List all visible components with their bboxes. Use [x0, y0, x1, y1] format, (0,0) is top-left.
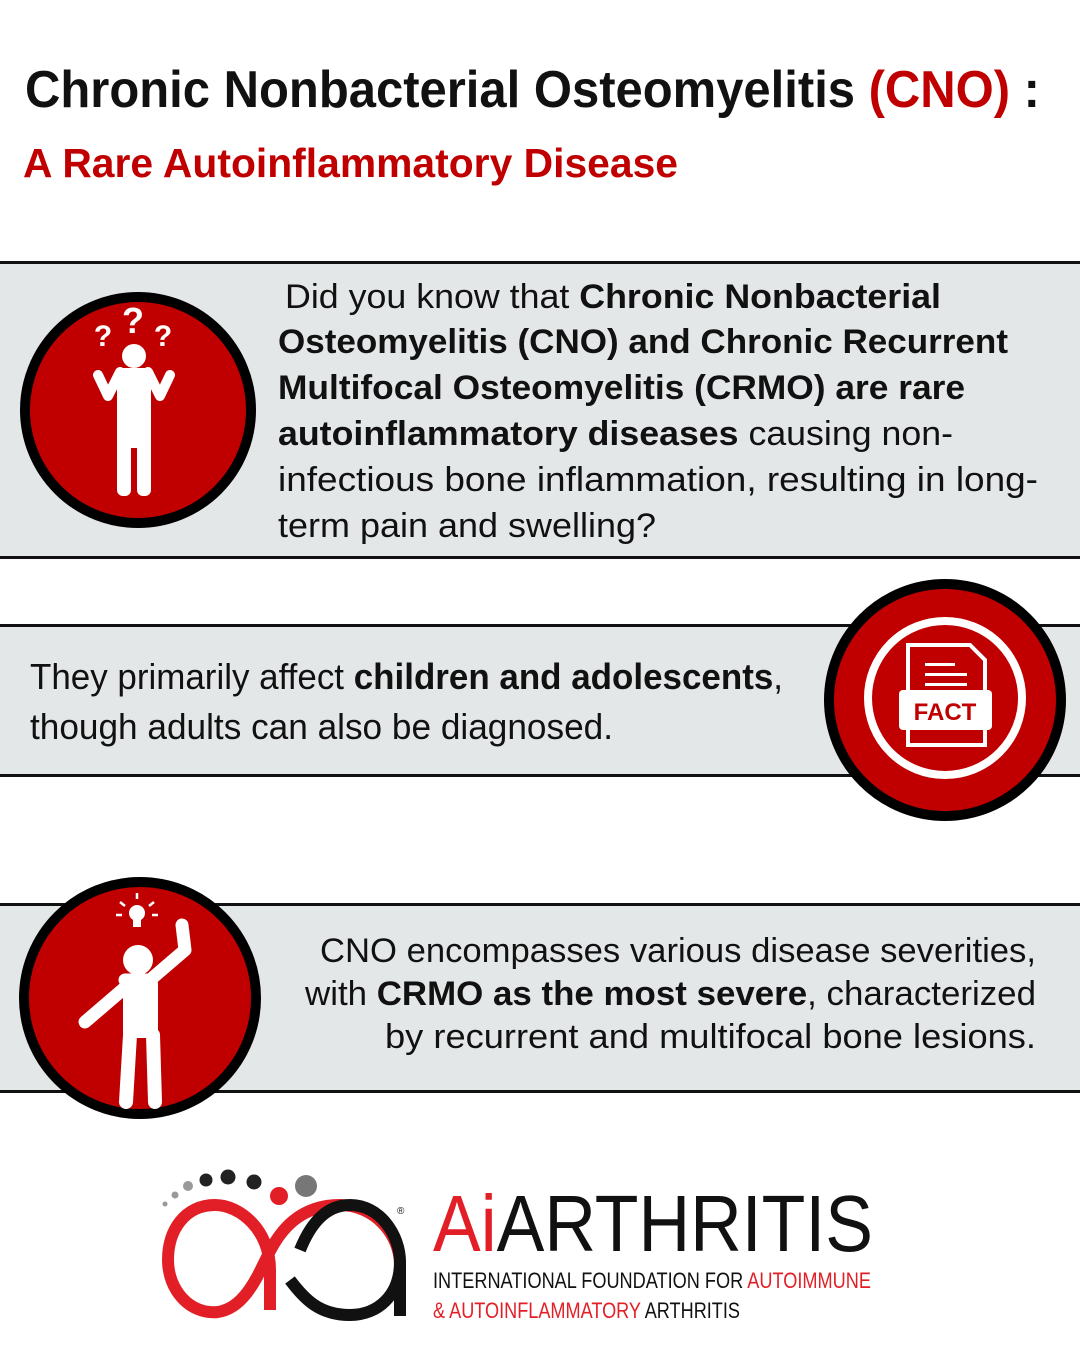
text block: did you know: Osteomyelitis (CNO) and Chronic Recurrent — [278, 323, 1008, 361]
panel: did you know — [0, 261, 1080, 559]
icon: confused person — [25, 297, 251, 523]
text block: did you know: Multifocal Osteomyelitis (CRMO) are rare — [278, 369, 965, 407]
logo wordmark: AiARTHRITIS — [433, 1179, 873, 1268]
text block: children: They primarily affect children and adolescents, — [30, 656, 783, 697]
text block: children — [30, 656, 783, 747]
text block: did you know: infectious bone inflammation, resulting in long- — [278, 461, 1038, 499]
text block: severity: CNO encompasses various disease severities, — [320, 932, 1036, 970]
icon: confused person: ? — [94, 320, 112, 353]
logo mark: ® — [397, 1206, 405, 1217]
text block: did you know: term pain and swelling? — [278, 507, 656, 545]
panel: children and adolescents — [0, 584, 1080, 816]
text block: severity: by recurrent and multifocal bone lesions. — [385, 1018, 1036, 1056]
text block: severity — [304, 932, 1036, 1056]
icon: fact document — [829, 584, 1061, 816]
text block: severity: with CRMO as the most severe , characterized — [304, 975, 1036, 1013]
icon: fact document: FACT — [914, 699, 977, 726]
logo wordmark — [433, 1179, 873, 1323]
logo wordmark: INTERNATIONAL FOUNDATION FOR AUTOIMMUNE — [433, 1268, 871, 1293]
text block: did you know: Did you know that Chronic Nonbacterial — [285, 278, 941, 316]
icon: confused person: ? — [154, 320, 172, 353]
text block: children: though adults can also be diagnosed. — [30, 706, 613, 747]
text block: did you know: autoinflammatory diseases causing non- — [278, 415, 953, 453]
logo wordmark: & AUTOINFLAMMATORY ARTHRITIS — [433, 1298, 740, 1323]
panel: severity — [0, 882, 1080, 1114]
icon: confused person: ? — [122, 300, 144, 341]
logo mark — [162, 1170, 405, 1316]
title: Chronic Nonbacterial Osteomyelitis (CNO) : — [25, 61, 1040, 119]
subtitle: A Rare Autoinflammatory Disease — [23, 140, 678, 186]
icon: idea person — [24, 882, 256, 1114]
text block: did you know — [278, 278, 1038, 545]
logo — [162, 1170, 873, 1323]
